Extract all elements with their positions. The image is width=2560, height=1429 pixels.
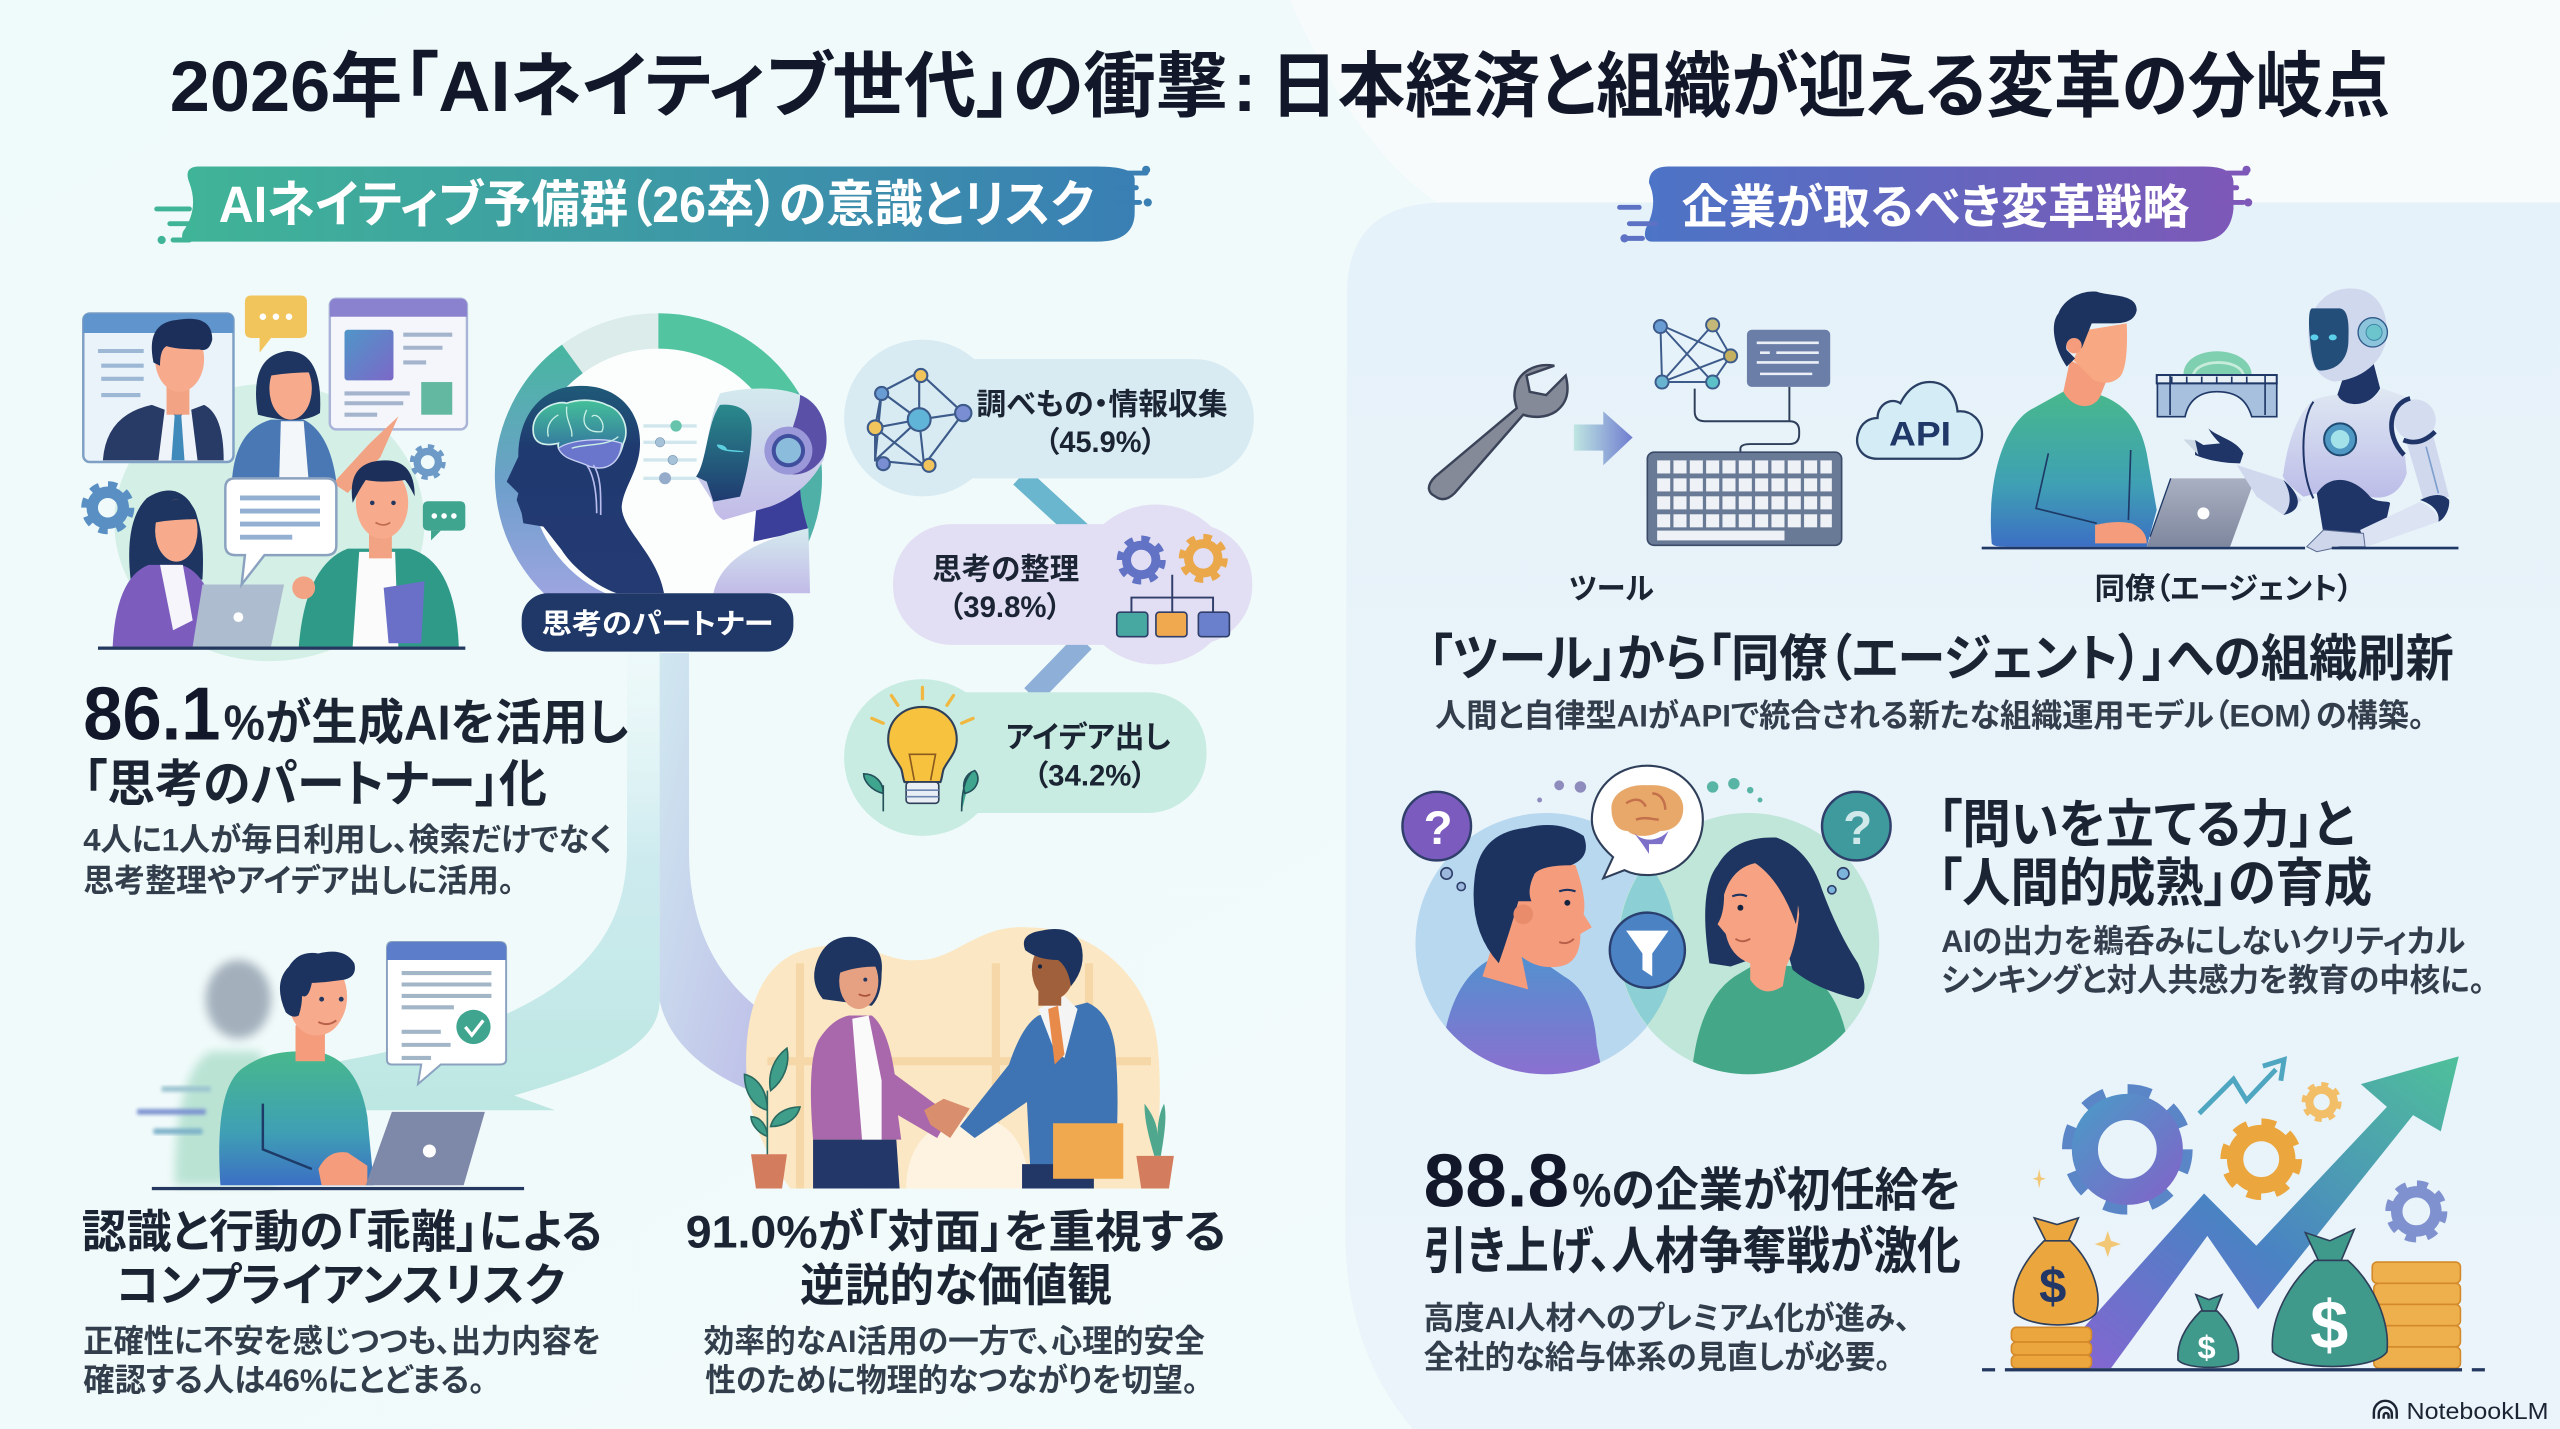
text block: 91.0% in person	[686, 1206, 1226, 1398]
icon: blue gear	[85, 485, 131, 531]
illustration: two people questioning	[1402, 766, 1891, 1078]
icon: light bulb with leaves	[864, 687, 978, 811]
colleague scene	[1982, 288, 2458, 552]
arrow: rising zigzag	[2047, 1056, 2459, 1368]
bubble: idea generation 34.2%: アイデア出し	[1006, 720, 1171, 755]
bubble: organising thoughts 39.8%	[893, 504, 1252, 664]
figure: woman with laptop	[113, 491, 284, 647]
illustration: tool to colleague	[1429, 288, 2458, 552]
brain speech bubble	[1592, 766, 1703, 878]
icon: network	[868, 369, 971, 472]
sparkles	[2033, 1169, 2121, 1257]
text block: 86.1% usage: 思考整理やアイデア出しに活用。	[83, 862, 514, 898]
text block: question-raising power: 「問いを立てる力」と	[1938, 796, 2354, 854]
coins: right stack	[2372, 1262, 2460, 1368]
icon: API cloud	[1857, 382, 1982, 459]
bubble: organising thoughts 39.8%: 思考の整理	[932, 553, 1079, 587]
figure: woman facing left	[1691, 837, 1864, 1078]
text block: 86.1% usage	[83, 672, 629, 898]
ground line	[152, 1187, 524, 1190]
text block: organizational renewal: 「ツール」から「同僚（エージェント）」への組織刷新	[1429, 630, 2454, 687]
text block: 88.8% salary: 引き上げ、人材争奪戦が激化	[1424, 1223, 1961, 1280]
title: :	[1233, 47, 1257, 127]
text block: 86.1% usage: 「思考のパートナー」化	[83, 756, 547, 813]
figure: man with folder	[924, 929, 1123, 1189]
gear: small orange	[2304, 1085, 2339, 1119]
illustration: person checking AI output	[137, 942, 524, 1190]
text block: 88.8% salary	[1424, 1139, 1961, 1375]
bubble: idea generation 34.2%	[844, 679, 1207, 836]
pill label	[522, 593, 793, 652]
text block: organizational renewal: 人間と自律型AIがAPIで統合される新たな組織運用モデル（EOM）の構築。	[1435, 698, 2424, 734]
icon: green chat bubble	[423, 501, 465, 540]
text block: compliance risk	[82, 1206, 602, 1398]
icon: screen	[1747, 330, 1830, 387]
text block: compliance risk: コンプライアンスリスク	[116, 1260, 565, 1311]
banner: left section heading: AIネイティブ予備群（26卒）の意識とリスク	[219, 176, 1094, 233]
speech bubble: text lines	[225, 478, 336, 584]
icon: question mark purple	[1402, 792, 1471, 891]
ground line	[1982, 1368, 2485, 1371]
money bag: small: $	[2198, 1328, 2216, 1365]
icon: wrench	[1429, 365, 1568, 499]
bubble: research 45.9%	[844, 340, 1254, 496]
icon: bridge	[2157, 351, 2277, 417]
gear: small blue	[2389, 1184, 2443, 1238]
labels: tool and colleague: ツール	[1569, 573, 1654, 606]
diagram: human and AI thought partner	[507, 331, 827, 652]
text block: 88.8% salary: 88.8	[1424, 1139, 1569, 1223]
connectors between usage bubbles	[1020, 477, 1084, 696]
gear: orange	[2226, 1124, 2296, 1194]
labels: tool and colleague	[1569, 572, 2353, 606]
text block: compliance risk: 確認する人は46%にとどまる。	[83, 1362, 485, 1398]
text block: 86.1% usage: 86.1	[83, 672, 220, 756]
icon: question mark purple: ?	[1424, 802, 1453, 855]
icon: small gear	[412, 447, 443, 478]
title	[170, 47, 2390, 127]
text block: compliance risk: 認識と行動の「乖離」による	[82, 1206, 602, 1257]
money bag: large green	[2272, 1229, 2387, 1367]
figure: presenting woman	[232, 351, 398, 493]
icon: gears and tree	[1117, 537, 1229, 637]
handshake	[924, 1099, 970, 1138]
icon: yellow chat bubble	[245, 296, 307, 353]
arrow: tool to system	[1574, 411, 1633, 465]
window: video call man	[83, 313, 233, 462]
bubble: organising thoughts 39.8%: （39.8%）	[949, 591, 1061, 624]
text block: 91.0% in person: 逆説的な価値観	[800, 1260, 1112, 1311]
bubble: research 45.9%: （45.9%）	[1045, 426, 1156, 459]
text block: 88.8% salary: %の企業が初任給を	[1572, 1165, 1961, 1218]
arrow: flow from partner to risks and values	[327, 653, 767, 1110]
illustration: growth, gears and money	[1982, 1056, 2485, 1371]
plants	[744, 1048, 1174, 1189]
icon: keyboard	[1647, 452, 1842, 545]
coins: left stack	[2011, 1327, 2091, 1368]
figure: man at laptop	[219, 952, 485, 1185]
labels: tool and colleague: 同僚（エージェント）	[2095, 572, 2353, 606]
title: 2026年「AIネイティブ世代」の衝撃	[170, 47, 1228, 127]
banner: right section heading	[1620, 166, 2252, 242]
icon: filter funnel	[1610, 913, 1685, 988]
ground line	[1982, 547, 2458, 549]
text block: question-raising power	[1938, 796, 2485, 998]
text block: 91.0% in person: 性のために物理的なつながりを切望。	[705, 1362, 1198, 1398]
text block: 86.1% usage: %が生成AIを活用し	[224, 697, 629, 751]
gear: large blue	[2072, 1094, 2183, 1205]
figure: robot	[2183, 288, 2449, 552]
text block: question-raising power: 「人間的成熟」の育成	[1938, 855, 2372, 913]
illustration: team collaborating online	[83, 296, 467, 661]
money bag: large green: $	[2310, 1287, 2348, 1364]
text block: 88.8% salary: 全社的な給与体系の見直しが必要。	[1424, 1339, 1891, 1375]
window: document panel	[330, 299, 467, 429]
motion lines	[137, 1089, 211, 1131]
cables	[1695, 387, 1799, 454]
illustration: handshake in person	[744, 927, 1174, 1189]
document with check mark	[387, 942, 506, 1084]
warm backdrop	[746, 927, 1160, 1189]
icon: question mark teal	[1822, 792, 1891, 894]
figure: robot head	[696, 388, 827, 593]
figure: woman	[811, 937, 950, 1189]
banner: left section heading	[157, 166, 1152, 244]
money bag: left: $	[2039, 1260, 2066, 1314]
signal dots	[643, 420, 697, 484]
banner: right section heading: 企業が取るべき変革戦略	[1682, 182, 2189, 235]
text block: 91.0% in person: 効率的なAI活用の一方で、心理的安全	[704, 1323, 1205, 1359]
figure: man with tablet	[292, 460, 459, 647]
title: 日本経済と組織が迎える変革の分岐点	[1270, 47, 2390, 127]
small trend arrow	[2199, 1060, 2284, 1113]
money bag: left	[2013, 1218, 2098, 1325]
ground line	[98, 647, 465, 650]
blurred previous self	[175, 960, 276, 1185]
pill label: 思考のパートナー	[542, 608, 773, 640]
text block: question-raising power: AIの出力を鵜呑みにしないクリティカル	[1941, 923, 2465, 959]
figure: human head with brain	[507, 386, 664, 593]
icon: question mark teal: ?	[1843, 802, 1872, 855]
text block: 88.8% salary: 高度AI人材へのプレミアム化が進み、	[1424, 1300, 1910, 1336]
bubble: idea generation 34.2%: （34.2%）	[1033, 759, 1146, 792]
bubble: research 45.9%: 調べもの・情報収集	[976, 388, 1228, 422]
figure: man with laptop	[1991, 291, 2255, 547]
icon: API cloud: API	[1889, 416, 1951, 454]
text block: 86.1% usage: 4人に1人が毎日利用し、検索だけでなく	[83, 822, 612, 858]
panel: strategy background	[1345, 202, 2560, 1429]
money bag: small	[2178, 1295, 2239, 1367]
logo: NotebookLM: NotebookLM	[2407, 1398, 2549, 1424]
text block: organizational renewal	[1429, 630, 2454, 734]
icon: network nodes	[1654, 318, 1737, 389]
text block: 91.0% in person: 91.0%が「対面」を重視する	[686, 1206, 1226, 1257]
text block: question-raising power: シンキングと対人共感力を教育の中核に。	[1941, 962, 2485, 998]
figure: man facing right	[1440, 825, 1603, 1078]
text block: compliance risk: 正確性に不安を感じつつも、出力内容を	[83, 1323, 601, 1359]
thought dots	[1537, 778, 1762, 802]
